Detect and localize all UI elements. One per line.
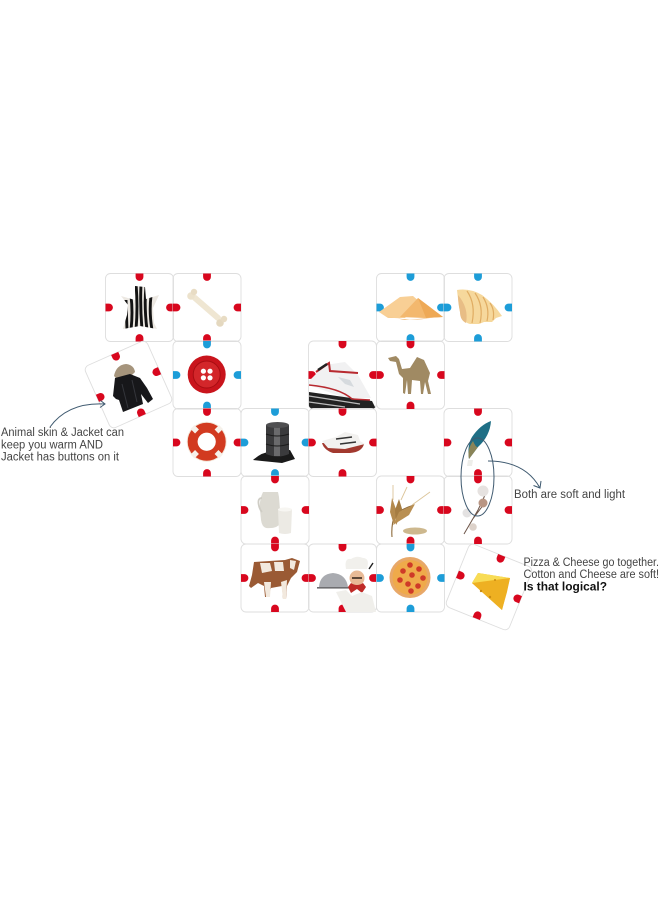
tile: sand (376, 274, 444, 342)
icon: milk jug and glass (258, 492, 292, 534)
text: jacket note: Animal skin & Jacket can (1, 427, 124, 439)
tile: wheat (376, 476, 444, 544)
tile: pizza (376, 544, 444, 612)
arrow: to jacket (50, 400, 105, 427)
tile: oil barrel (241, 408, 309, 476)
tile: zebra skin (106, 274, 174, 342)
tile: cotton (444, 476, 512, 544)
icon: feather (467, 421, 491, 466)
annotation: animal skin and jacket (1, 400, 127, 464)
icon: cheese wedge (472, 573, 510, 610)
icon: lifebuoy (187, 422, 227, 462)
text: pizza and cheese note: Is that logical? (524, 582, 607, 594)
text: soft and light note: Both are soft and light (514, 489, 626, 501)
icon: zebra skin (121, 286, 159, 329)
icon: oil barrel (253, 422, 295, 463)
tile: cheese (445, 543, 533, 631)
arrow: to soft and light note (488, 461, 541, 488)
annotation: feather and cotton (461, 438, 626, 516)
tile: ship (308, 408, 376, 476)
tile: feather (444, 408, 512, 476)
tile: bone (173, 274, 241, 342)
icon: sand piles (379, 296, 443, 320)
icon: motor yacht (322, 432, 365, 453)
tile: cow (241, 544, 309, 612)
icon: bone (187, 289, 227, 327)
icon: chef with cloche (317, 557, 376, 612)
icon: seashell (457, 290, 502, 324)
icon: red button (188, 356, 226, 394)
tile: lifebuoy (173, 408, 241, 476)
icon: wheat and grain (390, 485, 430, 537)
icon: pizza (390, 557, 430, 598)
tile: button (173, 341, 241, 409)
icon: camel (388, 356, 431, 394)
tile: camel (376, 341, 444, 409)
text: jacket note: Jacket has buttons on it (1, 452, 120, 464)
tile: seashell (444, 274, 512, 342)
tile: jacket (84, 340, 173, 429)
icon: high speed train (309, 362, 376, 409)
tile: train (308, 341, 376, 409)
text: jacket note: keep you warm AND (1, 440, 103, 452)
ellipse: feather and cotton highlight (461, 438, 494, 516)
tile: chef (308, 544, 376, 612)
icon: black jacket (113, 364, 153, 412)
tile: milk (241, 476, 309, 544)
icon: cow (249, 558, 300, 599)
icon: cotton branch (462, 486, 488, 534)
